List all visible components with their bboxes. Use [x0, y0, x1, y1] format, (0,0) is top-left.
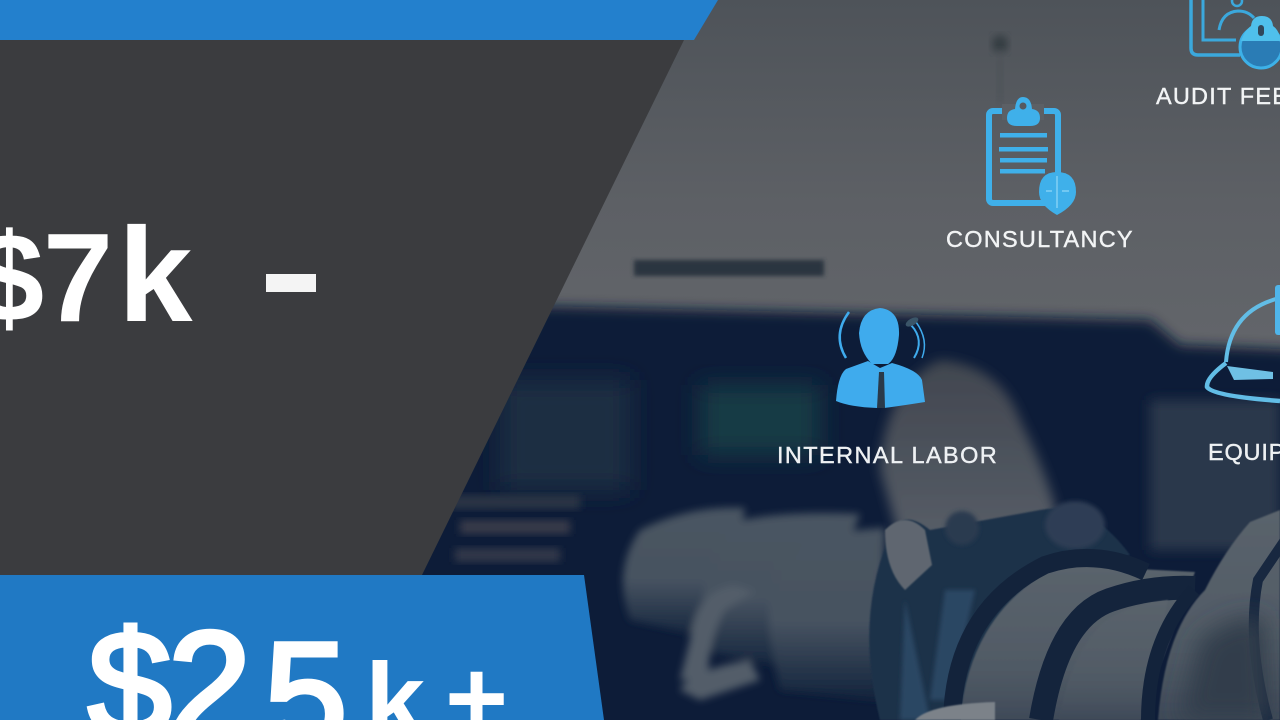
label: internal labor: INTERNAL LABOR: [777, 442, 998, 468]
icon: internal labor person: [836, 308, 925, 408]
icon: equipment hard hat: [1207, 285, 1280, 401]
pipe: left sections: [623, 508, 885, 700]
icon: audit fees clipboard and lock: [1191, 0, 1280, 68]
gloved hand: [869, 360, 1130, 720]
panel: bottom blue banner: [0, 575, 604, 720]
pipe: right sections and rings: [915, 510, 1280, 720]
icon: consultancy clipboard: [989, 97, 1076, 215]
text: upper cost figure: [88, 600, 508, 720]
panel: dark cost range panel: [0, 40, 684, 575]
label: consultancy: CONSULTANCY: [946, 226, 1134, 252]
text: lower cost figure: k: [118, 201, 193, 350]
panel: top blue banner: [0, 0, 718, 40]
range dash: [266, 274, 316, 292]
text: lower cost figure: 7: [43, 207, 113, 348]
